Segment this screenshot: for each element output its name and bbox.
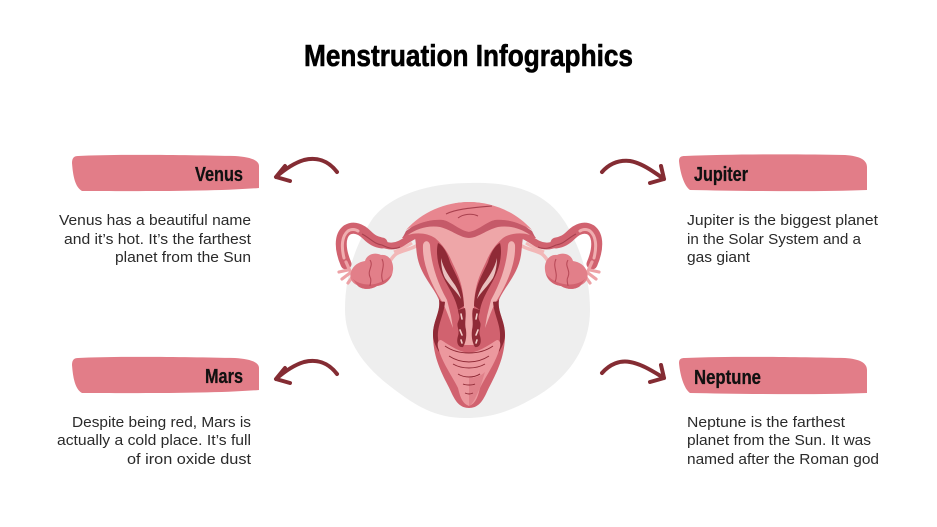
Mars description: actually a cold place. It’s full [57,432,251,449]
arrow: to Neptune [602,361,664,382]
arrow: to Venus [276,159,337,181]
Neptune label bar [679,357,867,394]
Jupiter heading: Jupiter [694,164,748,186]
Mars heading: Mars [205,366,243,388]
Venus description: Venus has a beautiful name [59,212,251,229]
Venus label bar [72,155,259,191]
Venus description: planet from the Sun [115,249,251,266]
title: Menstruation Infographics [304,38,633,73]
panel: Jupiter [679,154,879,266]
Jupiter description [687,212,879,266]
arrow: to Mars [276,361,337,383]
Jupiter description: in the Solar System and a [687,231,862,248]
Neptune description [687,414,879,468]
arrow: to Jupiter [602,161,664,183]
Mars description [57,414,252,468]
panel: Mars [57,357,259,468]
Mars description: of iron oxide dust [127,451,252,468]
Venus description [59,212,252,266]
Neptune description: planet from the Sun. It was [687,432,871,449]
Jupiter label bar [679,154,867,191]
Mars label bar [72,357,259,393]
panel: Neptune [679,357,879,468]
Jupiter description: Jupiter is the biggest planet [687,212,879,229]
Neptune description: Neptune is the farthest [687,414,846,431]
Neptune description: named after the Roman god [687,451,879,468]
Venus heading: Venus [195,164,243,186]
panel: Venus [59,155,259,266]
icon: gray blob behind uterus [345,183,590,418]
Venus description: and it’s hot. It’s the farthest [64,231,252,248]
Mars description: Despite being red, Mars is [72,414,251,431]
illustration: uterus anatomy [339,202,599,408]
Neptune heading: Neptune [694,367,761,389]
Jupiter description: gas giant [687,249,751,266]
